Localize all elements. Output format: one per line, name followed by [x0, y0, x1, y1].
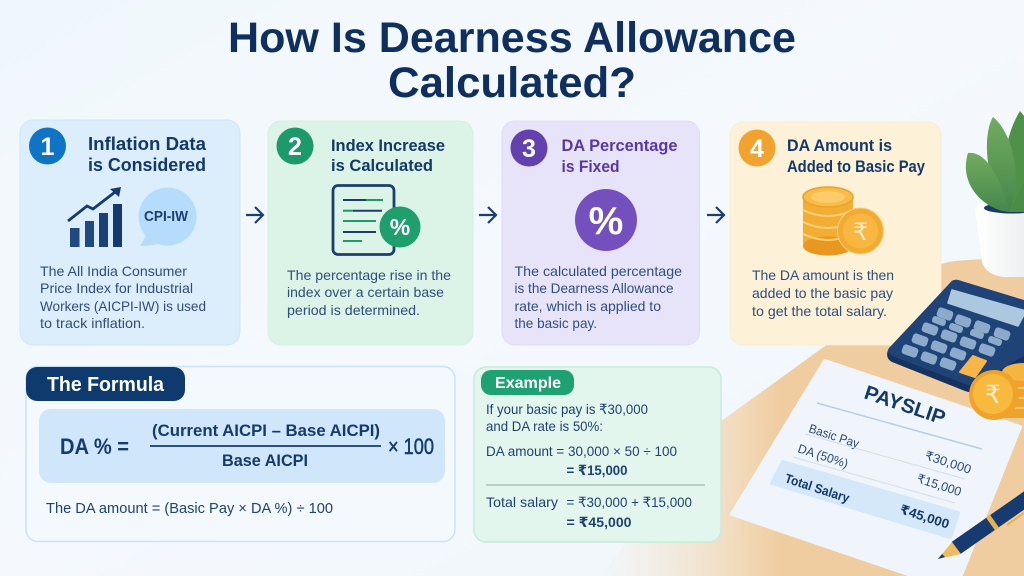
step 1 heading: Inflation Data [88, 134, 207, 154]
DA amount formula: The DA amount = (Basic Pay × DA %) ÷ 100 [46, 500, 333, 517]
step 1 description: The All India Consumer [40, 263, 187, 279]
panel: example [474, 367, 721, 542]
step 3 description: rate, which is applied to [514, 298, 661, 314]
step 4 heading: Added to Basic Pay [787, 157, 925, 176]
step 3 description: the basic pay. [514, 315, 597, 331]
icon: percent circle [575, 189, 637, 251]
title: Calculated? [388, 59, 636, 107]
arrow: step 2 to 3 [479, 207, 496, 223]
example premise: and DA rate is 50%: [486, 418, 603, 434]
example premise [486, 401, 648, 434]
step 3 badge [510, 130, 548, 166]
rupee coins: ₹ [985, 381, 1001, 409]
total salary calculation: = ₹30,000 + ₹15,000 [566, 494, 692, 510]
step 2 description [287, 267, 451, 318]
DA amount calculation [486, 443, 677, 478]
DA row: DA (50%) [796, 442, 850, 471]
payslip sheet [732, 361, 1020, 576]
step 4 description: The DA amount is then [752, 267, 894, 283]
arrow: step 1 to 2 [246, 207, 263, 223]
formula heading pill [26, 367, 185, 401]
step 2 badge [276, 128, 314, 164]
step 4 description: to get the total salary. [752, 303, 887, 319]
basic pay row [807, 422, 973, 477]
basic pay row: Basic Pay [807, 422, 862, 451]
formula equation box: (Current AICPI – Base AICPI) [152, 421, 380, 440]
step 1 badge [29, 128, 66, 164]
total salary calculation [486, 494, 692, 530]
step 2 description: period is determined. [287, 302, 420, 318]
step 1 description [40, 263, 206, 331]
basic pay row: ₹30,000 [923, 449, 973, 477]
pot soil [984, 202, 1024, 214]
payslip title: PAYSLIP [861, 382, 948, 430]
step 1 description: Workers (AICPI-IW) is used [40, 298, 206, 314]
arrow: step 3 to 4 [707, 207, 724, 223]
icon: CPI-IW speech bubble: CPI-IW [144, 209, 188, 225]
desk items [732, 280, 1024, 576]
example heading pill: Example [495, 375, 561, 392]
rupee coins [969, 363, 1024, 420]
example premise: If your basic pay is ₹30,000 [486, 401, 648, 417]
icon: coin stack with rupee [803, 187, 884, 256]
DA row [796, 442, 963, 499]
step 1 heading [88, 134, 207, 175]
total salary row: ₹45,000 [898, 502, 951, 532]
title: How Is Dearness Allowance [228, 14, 796, 62]
step 4 description [752, 267, 894, 319]
panel: step 3 DA percentage [502, 121, 700, 345]
formula equation box [39, 409, 445, 483]
step 4 badge: 4 [750, 135, 764, 163]
panel: step 1 inflation data [20, 120, 240, 345]
icon: document with percent: % [390, 214, 410, 240]
step 3 description: The calculated percentage [514, 263, 682, 279]
step 2 description: The percentage rise in the [287, 267, 451, 283]
plant in white pot [966, 111, 1024, 277]
calculator screen [948, 290, 1024, 326]
DA amount calculation: DA amount = 30,000 × 50 ÷ 100 [486, 443, 677, 459]
calculator keys [901, 307, 1011, 371]
icon: coin stack with rupee: ₹ [853, 219, 868, 246]
step 3 description [514, 263, 682, 331]
step 3 heading [562, 136, 678, 176]
icon: rising bar chart [68, 187, 122, 247]
icon: CPI-IW speech bubble [139, 188, 197, 246]
step 1 description: to track inflation. [40, 315, 145, 331]
calculator [887, 280, 1024, 392]
step 2 heading: is Calculated [331, 156, 433, 175]
step 2 description: index over a certain base [287, 284, 444, 300]
pen [938, 495, 1024, 559]
pot [975, 198, 1024, 277]
step 3 description: is the Dearness Allowance [514, 280, 674, 296]
formula heading pill: The Formula [47, 374, 165, 396]
icon: document with percent [333, 186, 420, 254]
step 1 description: Price Index for Industrial [40, 280, 193, 296]
desk surface [600, 258, 1024, 576]
step 3 heading: is Fixed [562, 157, 620, 176]
total salary row [772, 462, 958, 537]
total salary calculation: Total salary [486, 494, 558, 510]
example heading pill [481, 370, 574, 395]
formula equation box: × 100 [388, 434, 434, 459]
DA amount calculation: = ₹15,000 [566, 462, 628, 478]
calculator orange key [960, 356, 986, 377]
total salary calculation: = ₹45,000 [566, 514, 632, 530]
step 3 heading: DA Percentage [562, 136, 678, 155]
plant leaves [966, 111, 1024, 212]
title [228, 14, 796, 107]
step 1 badge: 1 [41, 133, 55, 161]
step 4 badge [738, 130, 776, 166]
DA row: ₹15,000 [915, 472, 963, 499]
step 2 badge: 2 [288, 133, 302, 161]
formula equation box: Base AICPI [222, 451, 308, 470]
step 1 heading: is Considered [88, 155, 206, 175]
panel: the formula [26, 366, 455, 542]
panel: step 2 index increase [268, 121, 473, 345]
formula equation box: DA % = [60, 434, 129, 459]
icon: percent circle: % [589, 200, 623, 243]
step 2 heading: Index Increase [331, 136, 445, 155]
step 3 badge: 3 [522, 135, 536, 163]
step 4 heading [787, 136, 925, 176]
step 2 heading [331, 136, 445, 175]
total salary row: Total Salary [783, 471, 852, 506]
panel: step 4 DA amount [730, 122, 941, 345]
step 4 heading: DA Amount is [787, 136, 892, 155]
step 4 description: added to the basic pay [752, 285, 893, 301]
